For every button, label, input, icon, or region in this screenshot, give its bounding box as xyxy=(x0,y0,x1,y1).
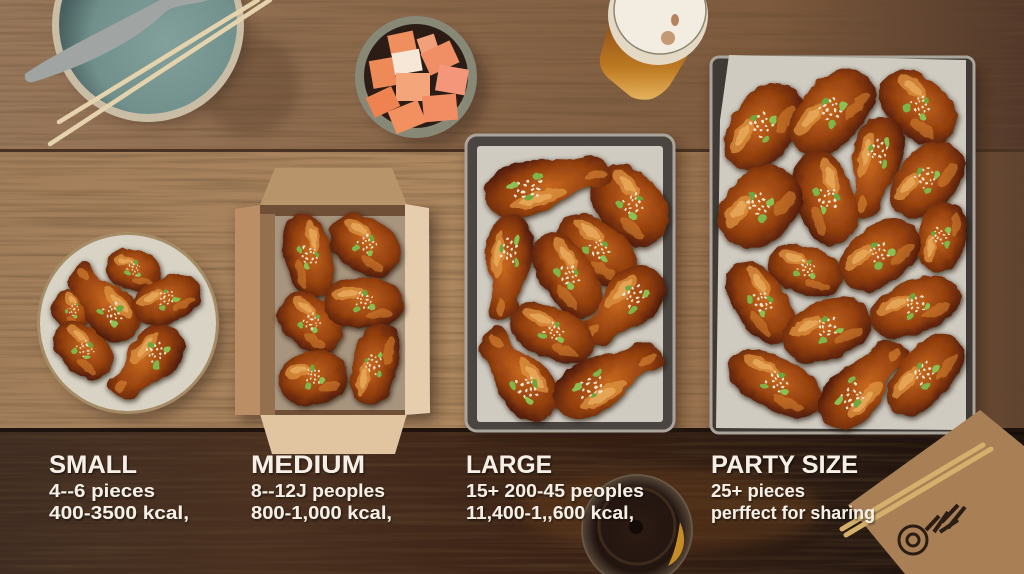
label: large: 11,400-1,,600 kcal, xyxy=(466,502,634,523)
label: party size: 25+ pieces xyxy=(711,480,805,501)
label: party size: PARTY SIZE xyxy=(711,451,858,479)
icon: card chopsticks xyxy=(842,445,991,535)
label: small: 400-3500 kcal, xyxy=(49,502,189,523)
label: medium xyxy=(251,451,392,523)
box interior xyxy=(260,205,407,415)
radish cubes xyxy=(366,31,469,134)
label: large: 15+ 200-45 peoples xyxy=(466,480,644,501)
panel: medium kraft box of wings xyxy=(235,168,436,454)
label: small xyxy=(49,451,189,523)
large wings xyxy=(463,140,683,433)
panel: small plate of wings xyxy=(37,232,224,420)
label: medium: 8--12J peoples xyxy=(251,480,385,501)
label: small: 4--6 pieces xyxy=(49,480,155,501)
label: large xyxy=(466,451,644,523)
label: medium: 800-1,000 kcal, xyxy=(251,502,392,523)
label: large: LARGE xyxy=(466,451,552,479)
bowl of pickled radish xyxy=(355,16,488,146)
panel: large tray of wings xyxy=(463,135,683,438)
box left flap xyxy=(235,205,260,415)
party wings xyxy=(705,53,976,442)
glass of drink on dark wood xyxy=(581,474,693,574)
box right flap xyxy=(405,204,430,415)
icon: chopsticks xyxy=(50,0,270,144)
beer glass xyxy=(600,0,708,100)
teal plate with knife and chopsticks xyxy=(25,0,270,144)
small wings xyxy=(43,245,208,413)
icon: knife xyxy=(25,0,208,82)
panel: party size tray of wings xyxy=(705,53,980,442)
label: small: SMALL xyxy=(49,451,137,479)
label: medium: MEDIUM xyxy=(251,451,365,479)
box top flap xyxy=(260,168,407,205)
icon: round logo xyxy=(899,505,965,554)
medium wings xyxy=(267,203,411,413)
label: party size xyxy=(711,451,875,523)
box bottom flap xyxy=(260,414,407,454)
kraft card with chopsticks and logo xyxy=(842,410,1024,574)
label: party size: perffect for sharing xyxy=(711,502,875,523)
